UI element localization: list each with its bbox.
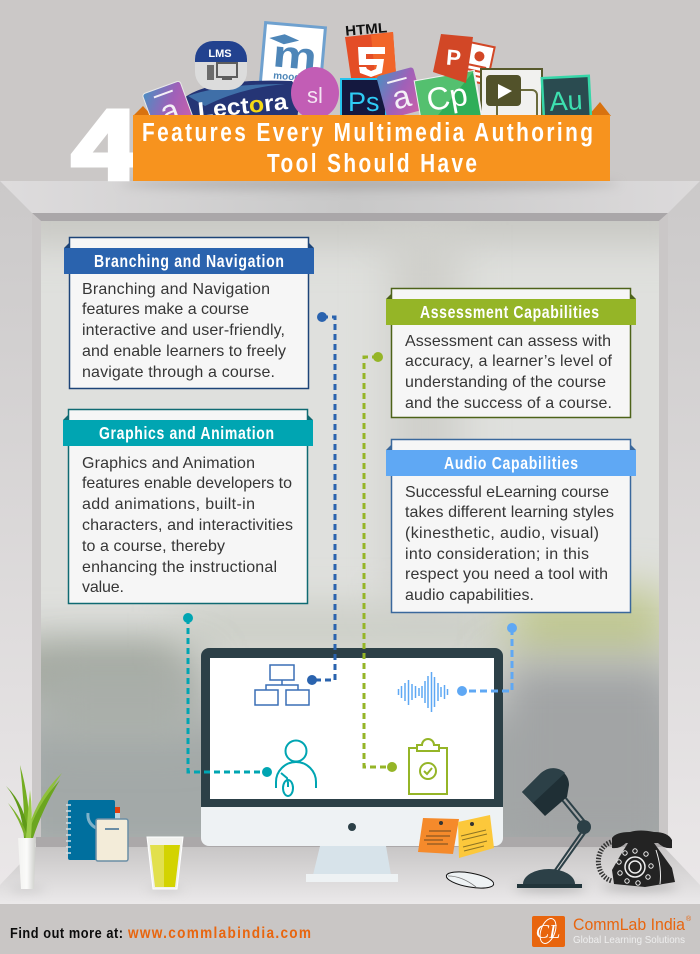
icon: HTML5 [345, 23, 396, 78]
icon: LMS: LMS [208, 48, 232, 60]
icon: Captivate [414, 70, 482, 115]
connector: graphics [183, 613, 272, 777]
icon: Articulate tile left [142, 81, 193, 115]
footer call to action [10, 924, 311, 942]
icon: HTML5: HTML [344, 19, 388, 39]
footer call to action: www.commlabindia.com [127, 925, 311, 942]
icon: Lectora [186, 80, 298, 115]
title: Features Every Multimedia Authoring [142, 118, 593, 147]
icon: PowerPoint P: P [445, 45, 462, 71]
title [142, 118, 593, 178]
icon: Storyline: sl [307, 83, 323, 108]
icon: Moodle: m [271, 33, 319, 79]
icon: box flaps [133, 102, 611, 116]
footer call to action: Find out more at: [10, 924, 123, 941]
text block [405, 484, 614, 604]
text block: features make a course [82, 301, 249, 318]
text block: Branching and Navigation [82, 281, 270, 298]
text block [82, 281, 286, 381]
text block: understanding of the course [405, 374, 606, 391]
icon: desk lamp [514, 768, 591, 892]
window sill and desk [0, 837, 700, 904]
icon: Articulate tile left: a [155, 91, 184, 131]
text block: features enable developers to [82, 475, 292, 492]
icon: Storyline [291, 67, 339, 119]
logo: CommLab India [532, 915, 692, 947]
text block: and enable learners to freely [82, 343, 286, 360]
connector: audio [457, 623, 517, 696]
icon: LMS [195, 41, 247, 90]
icon: Moodle: moodle [273, 70, 310, 85]
icon: Audition: Au [549, 85, 583, 117]
icon: Captivate: Cp [424, 76, 470, 118]
text block: into consideration; in this [405, 546, 589, 563]
icon: Articulate tile right: a [388, 77, 415, 117]
title: Tool Should Have [267, 149, 477, 178]
header: software icons spilling from box [70, 21, 611, 182]
connector: assessment [364, 352, 397, 772]
logo: CommLab India: Global Learning Solutions [573, 934, 685, 946]
big number 4: 4 [72, 90, 138, 200]
icon: computer mouse [445, 869, 495, 891]
logo: CommLab India: ® [686, 915, 692, 923]
icon: Photoshop [340, 78, 386, 115]
text block: takes different learning styles [405, 504, 614, 521]
heading: Assessment Capabilities [420, 302, 599, 322]
heading: Audio Capabilities [444, 453, 578, 473]
connector: branching [307, 312, 335, 685]
text block: Assessment can assess with [405, 333, 611, 350]
text block [82, 455, 293, 596]
text block: audio capabilities. [405, 587, 534, 604]
logo: CommLab India: CommLab India [573, 915, 685, 934]
text block: interactive and user-friendly, [82, 322, 285, 339]
text block: to a course, thereby [82, 538, 225, 555]
footer band [0, 904, 700, 954]
sticky notes [418, 815, 494, 858]
icon: Moodle [260, 23, 325, 88]
icon: notebook [66, 800, 128, 861]
text block: add animations, built-in [82, 496, 255, 513]
icon: Lectora: Lectora [196, 88, 289, 123]
text block: accuracy, a learner’s level of [405, 353, 613, 370]
icon: rotary telephone [598, 830, 678, 891]
heading: Branching and Navigation [94, 251, 284, 271]
heading: Graphics and Animation [99, 423, 274, 443]
text block: navigate through a course. [82, 364, 275, 381]
icon: Articulate tile right [376, 68, 419, 115]
icon: sound wave [398, 672, 448, 712]
text block: Graphics and Animation [82, 455, 255, 472]
icon: clipboard [409, 739, 447, 794]
icon: PowerPoint document [468, 42, 496, 84]
panel: Audio Capabilities [386, 440, 636, 612]
icon: glass of juice [147, 837, 183, 892]
panel: Branching and Navigation [64, 238, 314, 388]
icon: Audition [540, 74, 592, 115]
text block: respect you need a tool with [405, 566, 608, 583]
text block: Successful eLearning course [405, 484, 609, 501]
orange title banner [133, 115, 610, 181]
icon: plant [6, 765, 62, 892]
logo: CommLab India: CL [536, 921, 560, 943]
icon: video player [480, 68, 543, 115]
icon: sitemap [255, 665, 309, 705]
text block [405, 333, 613, 412]
icon: Photoshop: Ps [348, 87, 380, 117]
text block: (kinesthetic, audio, visual) [405, 525, 599, 542]
text block: enhancing the instructional [82, 559, 277, 576]
text block: value. [82, 579, 124, 596]
icon: PowerPoint P [433, 34, 473, 83]
icon: person with mouse [276, 740, 316, 796]
window frame [0, 178, 700, 905]
text block: characters, and interactivities [82, 517, 293, 534]
text block: and the success of a course. [405, 395, 612, 412]
window view with blurred background [41, 243, 659, 837]
panel: Assessment Capabilities [386, 288, 636, 418]
panel: Graphics and Animation [63, 410, 313, 604]
monitor [201, 648, 503, 882]
